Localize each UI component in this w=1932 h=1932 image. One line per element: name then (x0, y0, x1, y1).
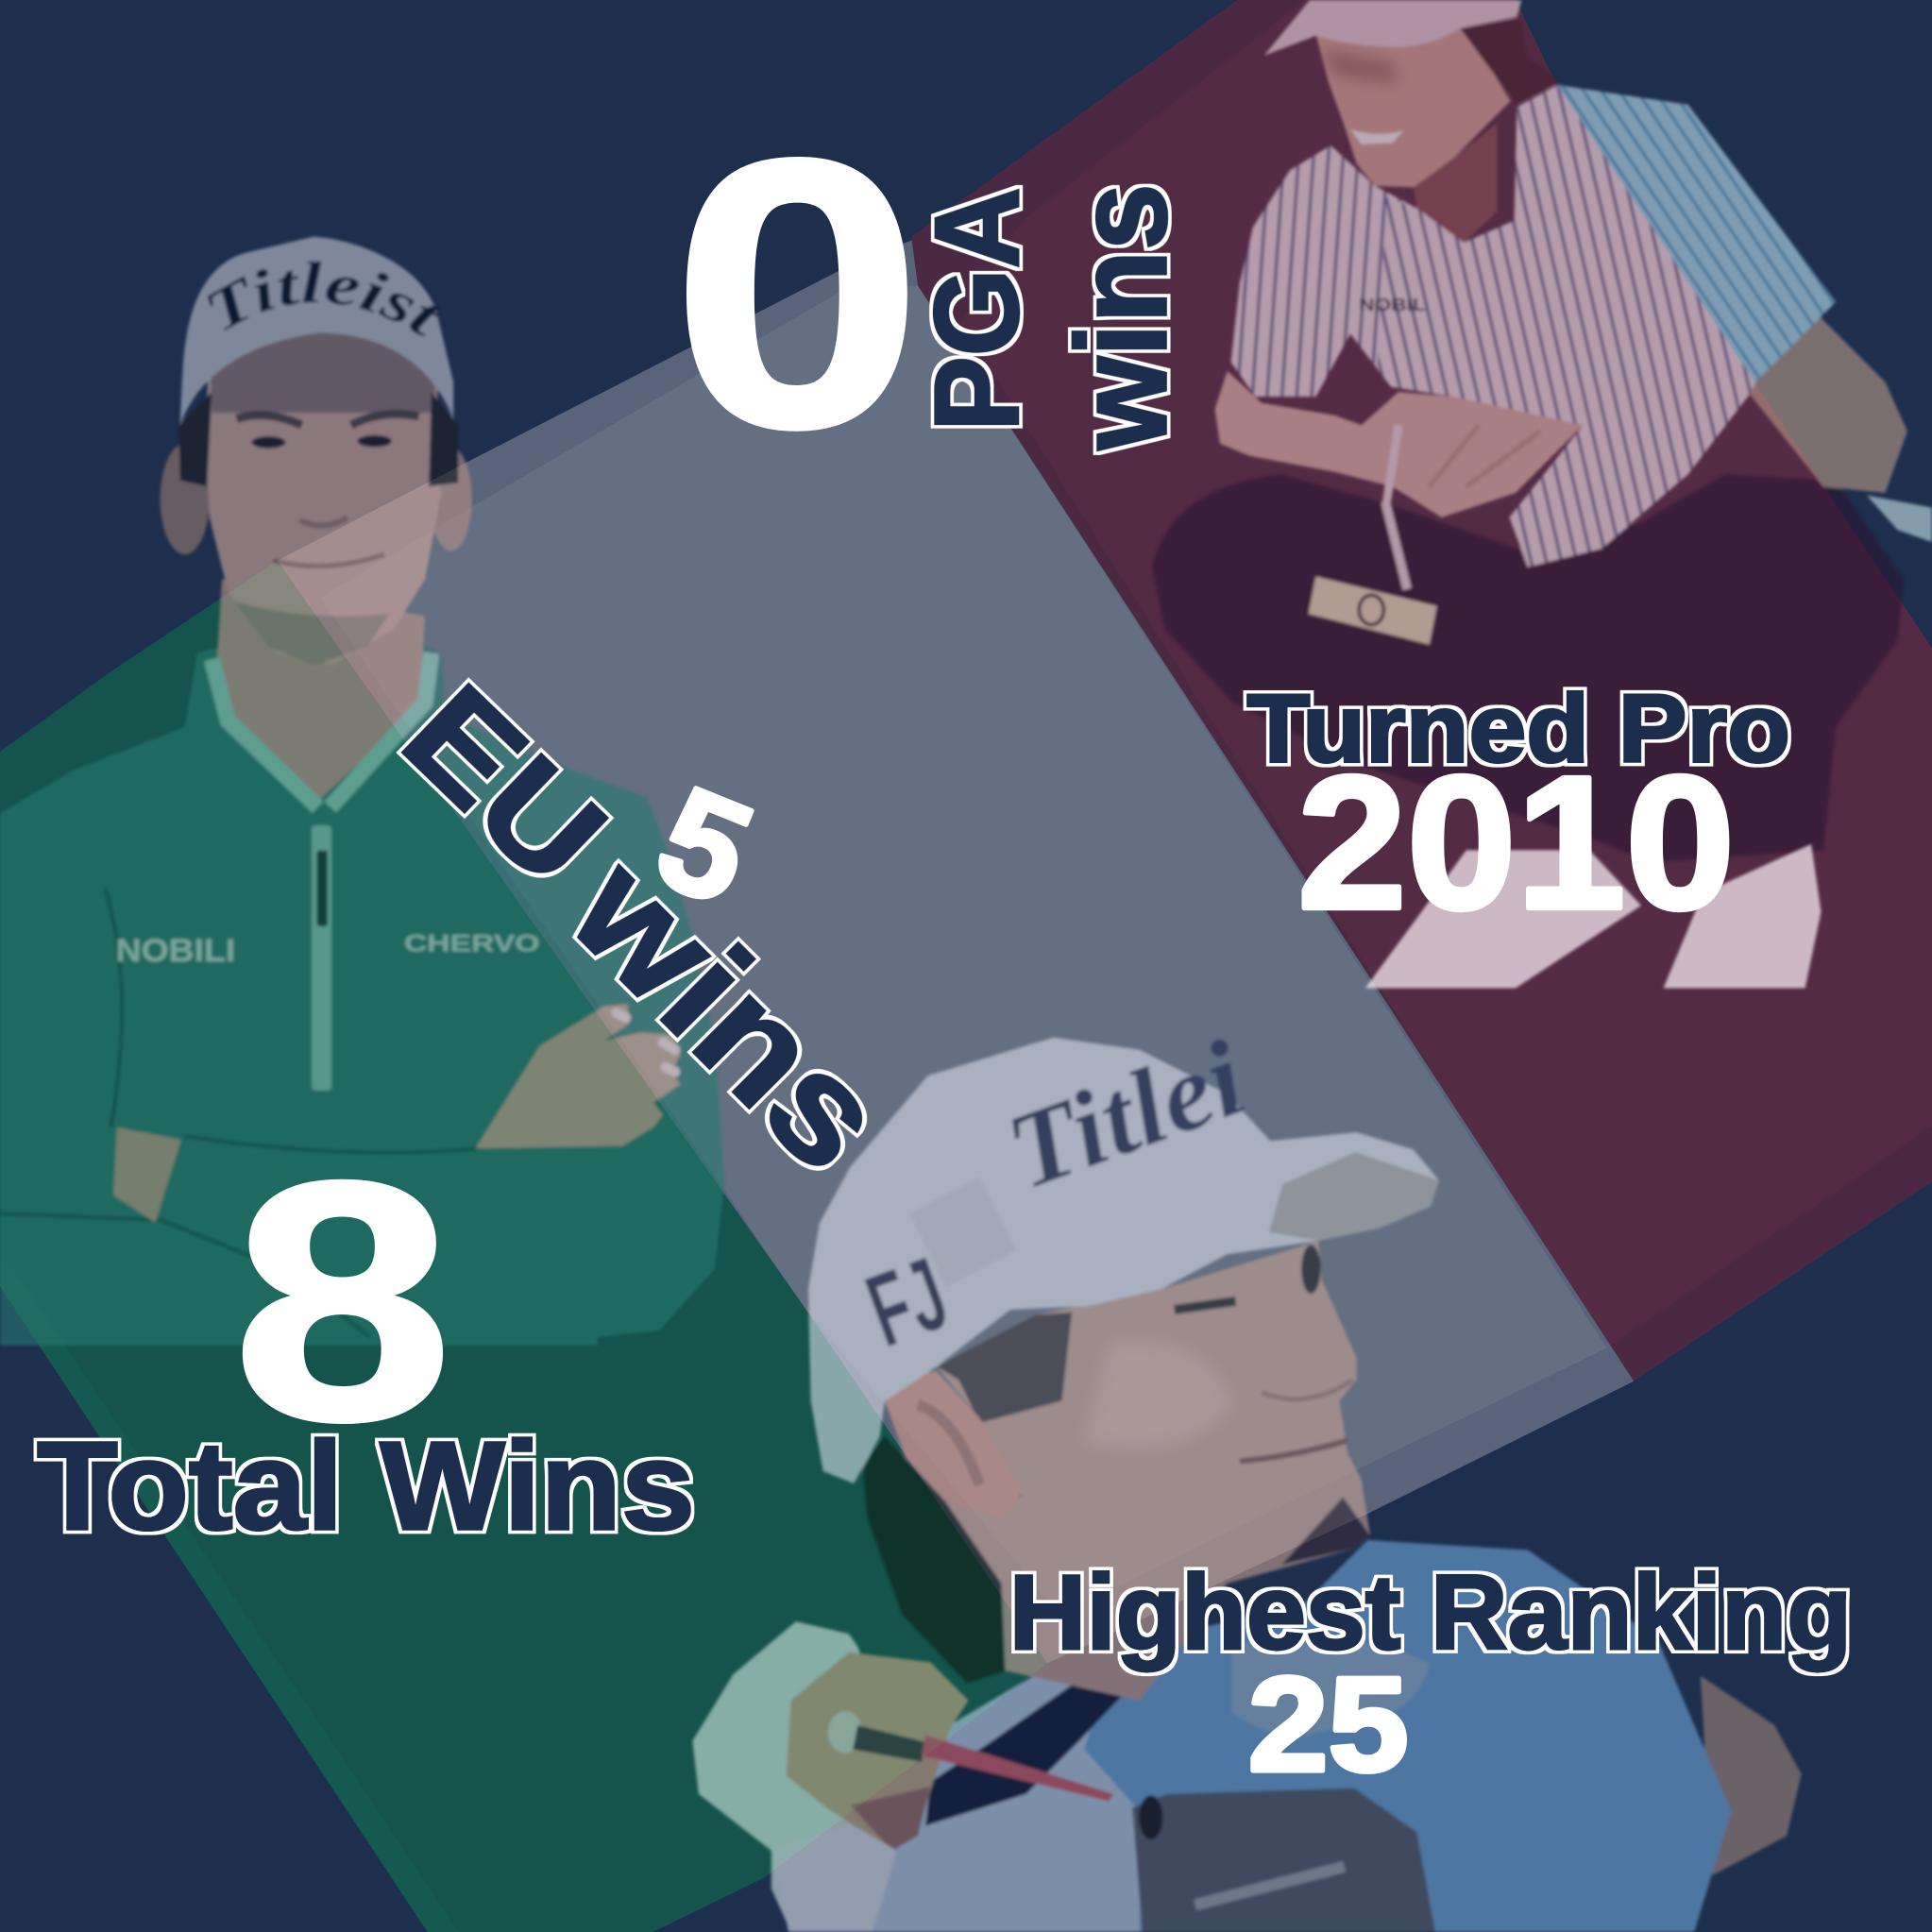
wrist (850, 1787, 930, 1851)
photo: golfer with crossed arms (0, 234, 725, 1347)
hand (476, 1004, 680, 1148)
nose line (1262, 1380, 1353, 1399)
label: wins: wins (540, 824, 917, 1202)
putter head (1309, 577, 1436, 644)
band: grey (278, 240, 1634, 1664)
mouth (274, 554, 384, 567)
label: Turned Pro: Turned Pro (1247, 674, 1790, 782)
glove (692, 1621, 912, 1932)
hair left (178, 392, 212, 486)
driver hosel (1139, 1795, 1163, 1839)
stat: highest ranking (1009, 1552, 1852, 1800)
stat: turned pro (1247, 674, 1790, 949)
left arm (1215, 371, 1584, 517)
beard shadow (234, 602, 389, 666)
cap logo: Titleist (206, 260, 440, 338)
driver highlight (1195, 1867, 1345, 1905)
zipper pull (316, 850, 328, 926)
sleeve (1557, 85, 1836, 382)
zip (312, 825, 331, 1091)
face (1316, 28, 1511, 187)
band: green (0, 561, 1047, 1932)
shoe: right (1664, 844, 1822, 988)
label: EU: EU (375, 655, 635, 914)
label: PGA: PGA (909, 187, 1043, 432)
trousers (1152, 474, 1904, 862)
cap (180, 237, 453, 425)
stat: EU wins (375, 655, 917, 1202)
number: 5: 5 (636, 755, 772, 936)
club rest (1867, 496, 1932, 542)
shaft (922, 1735, 1114, 1802)
cap (808, 1038, 1439, 1483)
label: Highest Ranking: Highest Ranking (1009, 1552, 1852, 1671)
stat: total wins (37, 1112, 695, 1556)
stat: PGA wins (671, 81, 1193, 506)
forearm (113, 1127, 181, 1222)
driver (1132, 1788, 1435, 1932)
shirt (869, 1540, 1731, 1932)
arm (1701, 1676, 1802, 1875)
far eye (1301, 1245, 1321, 1294)
photo: golfer swinging (692, 1018, 1802, 1932)
eyes (237, 415, 419, 425)
putter shaft (1386, 425, 1407, 589)
logo: Nobili: NOBILI (116, 933, 235, 969)
mouth (1350, 129, 1403, 144)
cheek highlight (1084, 1341, 1232, 1449)
grip (853, 1725, 926, 1762)
hair right (429, 392, 458, 486)
hair top (937, 1313, 1072, 1423)
shirt front (1378, 85, 1774, 567)
putter mark (1359, 595, 1383, 625)
face (206, 320, 441, 666)
forehead shade (210, 323, 437, 413)
number: 8: 8 (233, 1112, 452, 1491)
cap (1264, 0, 1521, 56)
collar (212, 653, 432, 807)
hair (1460, 19, 1561, 104)
neck (217, 579, 425, 801)
sleeve folds (0, 887, 481, 1337)
cap logo: Titlei (992, 1018, 1259, 1212)
band: maroon (912, 0, 1932, 1381)
strap (925, 1662, 1152, 1826)
hand shading (1430, 425, 1540, 486)
label: wins: wins (1049, 183, 1193, 450)
label: Total Wins: Total Wins (37, 1416, 695, 1556)
ear inner (918, 1405, 979, 1484)
neck (1414, 123, 1497, 243)
shirt logo: NOBIL (1359, 295, 1426, 314)
finger nails (616, 1013, 675, 1072)
mouth line (1240, 1440, 1348, 1462)
number: 0: 0 (671, 81, 923, 506)
ears (161, 444, 210, 554)
number: 25: 25 (1248, 1650, 1408, 1800)
nose (299, 517, 347, 526)
face (937, 1241, 1370, 1701)
photo: golfer crouching (1152, 0, 1932, 862)
ear (885, 1371, 1023, 1518)
shoe: left (1365, 850, 1641, 988)
jacket (0, 643, 724, 1346)
grip cap (828, 1711, 862, 1754)
pale shirt panel (873, 1652, 1140, 1932)
logo: Chervo: CHERVO (404, 931, 540, 957)
stubble (1281, 1497, 1370, 1565)
eye (1175, 1301, 1236, 1310)
hand (786, 1652, 969, 1851)
shirt (1231, 85, 1774, 567)
right arm (1750, 308, 1907, 493)
hair lower (862, 1436, 1006, 1683)
side logo: FJ (853, 1236, 962, 1369)
cap panel (909, 1177, 1016, 1288)
brow shadow (1321, 49, 1398, 84)
cap underside (1269, 1152, 1439, 1241)
shoes (1365, 844, 1822, 988)
number: 2010: 2010 (1297, 737, 1735, 949)
shirt pattern (1232, 1638, 1430, 1735)
glove cuff (771, 1823, 897, 1932)
